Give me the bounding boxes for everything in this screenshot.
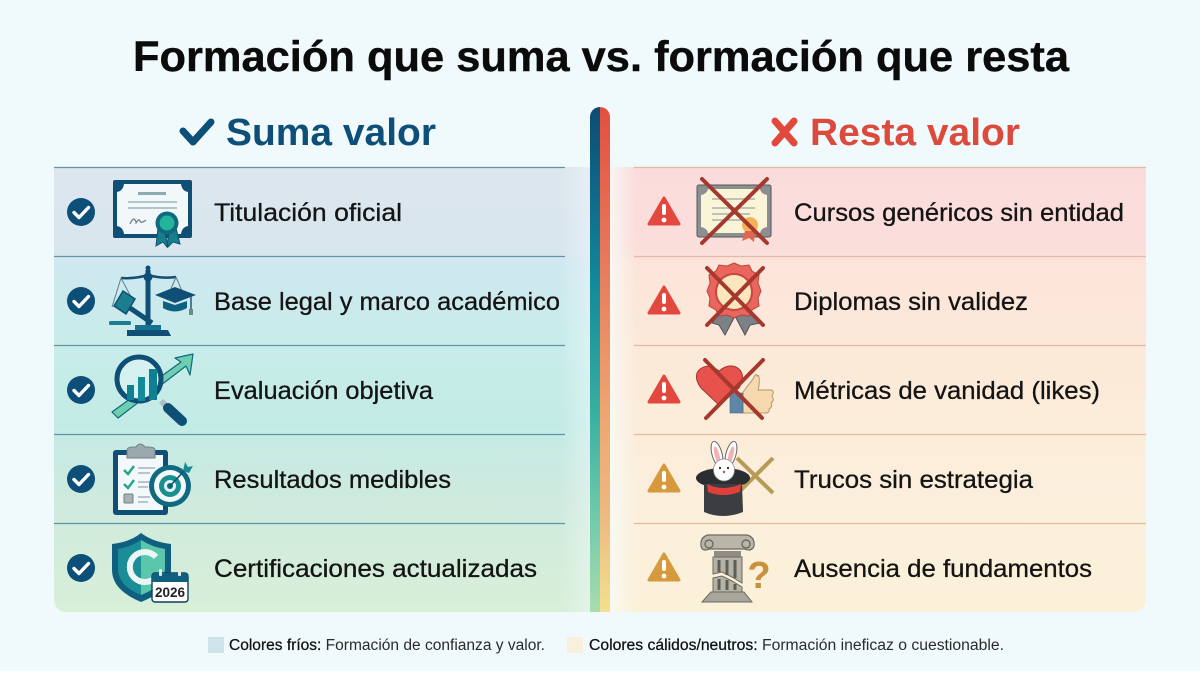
row: ausencia de fundamentos <box>649 535 1092 602</box>
icon: broken column with question mark: ? <box>747 555 771 597</box>
panel: resta valor <box>610 112 1146 612</box>
icon: crossed generic certificate <box>697 179 771 243</box>
row: cursos genéricos: Cursos genéricos sin entidad <box>794 199 1124 227</box>
row: métricas de vanidad <box>649 360 1100 418</box>
icon: warning <box>649 554 679 580</box>
icon: magnifier with chart and arrow <box>112 354 193 421</box>
icon: warning <box>649 198 679 224</box>
row: base legal: Base legal y marco académico <box>214 288 560 316</box>
row: base legal <box>67 266 560 336</box>
row: titulación oficial <box>67 180 402 247</box>
icon: shield with calendar 2026: 2026 <box>155 585 186 600</box>
row: certificaciones actualizadas <box>67 533 537 602</box>
icon: crossed heart and thumb up <box>696 360 773 418</box>
row: diplomas sin validez <box>649 263 1028 335</box>
panel: suma valor <box>54 112 590 612</box>
panel background: cool gradient <box>54 167 590 612</box>
icon: shield with calendar 2026 <box>112 533 188 602</box>
panel background: warm gradient <box>610 167 1146 612</box>
row: certificaciones actualizadas: Certificaciones actualizadas <box>214 555 537 583</box>
row: métricas de vanidad: Métricas de vanidad (likes) <box>794 377 1100 405</box>
row: trucos sin estrategia: Trucos sin estrategia <box>794 466 1033 494</box>
row: trucos sin estrategia <box>649 440 1033 516</box>
row: titulación oficial: Titulación oficial <box>214 199 402 227</box>
title: Formación que suma vs. formación que resta <box>133 33 1070 81</box>
row: resultados medibles <box>67 444 451 515</box>
heading: suma valor: Suma valor <box>226 112 436 154</box>
icon: scales, gavel and graduation cap <box>109 266 196 336</box>
legend <box>208 637 1004 654</box>
legend: warm colours: Colores cálidos/neutros: Formación ineficaz o cuestionable. <box>589 637 1004 654</box>
icon: warning <box>649 376 679 402</box>
icon: crossed rosette <box>707 263 763 335</box>
heading: resta valor: Resta valor <box>810 112 1020 154</box>
legend: cool colours: Colores fríos: Formación de confianza y valor. <box>229 637 545 654</box>
row: evaluación objetiva <box>67 354 433 421</box>
row: resultados medibles: Resultados medibles <box>214 466 451 494</box>
icon: warning <box>649 287 679 313</box>
row: cursos genéricos <box>649 179 1124 243</box>
row: diplomas sin validez: Diplomas sin validez <box>794 288 1028 316</box>
icon: clipboard and target <box>113 444 193 515</box>
icon: warning <box>649 465 679 491</box>
row: ausencia de fundamentos: Ausencia de fundamentos <box>794 555 1092 583</box>
icon: magic hat with rabbit and crossed wands <box>696 440 773 516</box>
icon: official certificate <box>113 180 192 247</box>
icon: broken column with question mark <box>701 535 771 602</box>
central divider bar <box>590 107 610 612</box>
row: evaluación objetiva: Evaluación objetiva <box>214 377 433 405</box>
